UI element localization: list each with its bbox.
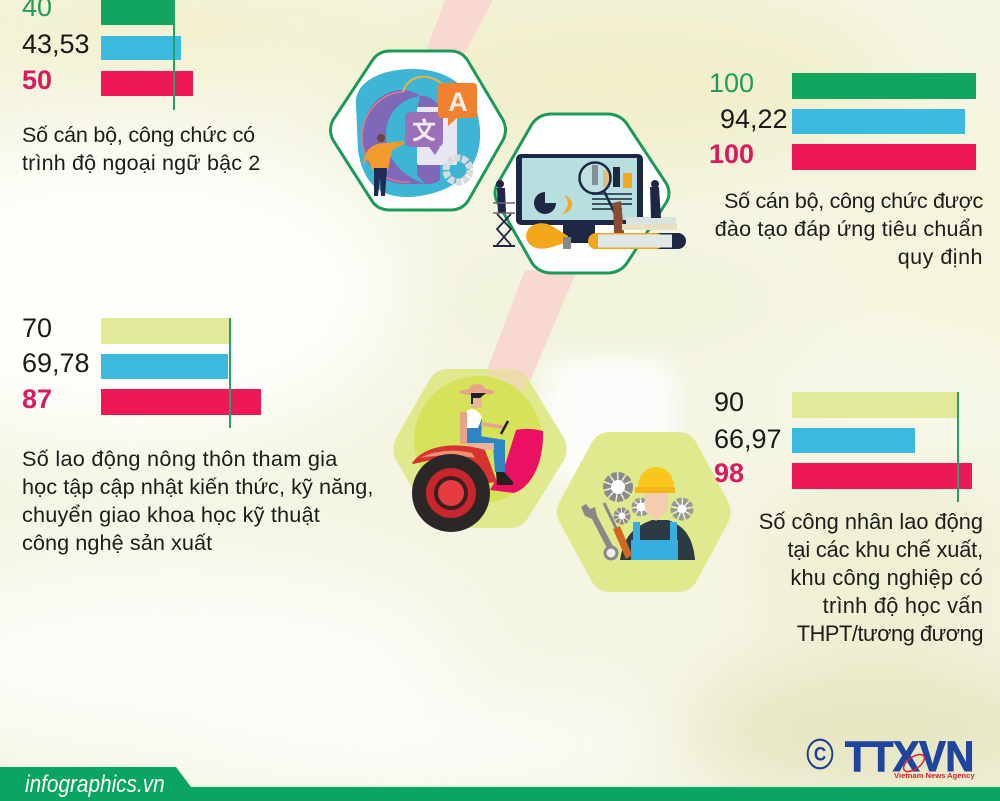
value 87: 87 bbox=[22, 384, 52, 414]
target line bbox=[173, 0, 174, 110]
bar green bbox=[792, 73, 976, 99]
icon: farmer on tractor bbox=[394, 369, 566, 532]
caption: học tập cập nhật kiến thức, kỹ năng, bbox=[22, 474, 374, 498]
caption: đào tạo đáp ứng tiêu chuẩn bbox=[715, 217, 983, 241]
logo: TTXVN bbox=[806, 733, 975, 781]
caption: THPT/tương đương bbox=[797, 621, 983, 646]
caption: khu công nghiệp có bbox=[790, 565, 983, 590]
caption bbox=[715, 189, 983, 269]
value 100: 100 bbox=[709, 68, 754, 98]
target line bbox=[229, 318, 230, 428]
bar green bbox=[101, 0, 174, 25]
caption bbox=[22, 446, 374, 554]
caption: Số công nhân lao động bbox=[759, 509, 983, 534]
caption: Số cán bộ, công chức được bbox=[724, 189, 983, 213]
caption: Số cán bộ, công chức có bbox=[22, 123, 255, 147]
caption bbox=[759, 509, 983, 646]
caption: quy định bbox=[898, 245, 983, 269]
value 69,78: 69,78 bbox=[22, 348, 90, 378]
caption: Số lao động nông thôn tham gia bbox=[22, 446, 338, 470]
panel: top-left chart bbox=[22, 0, 260, 175]
value 70: 70 bbox=[22, 313, 52, 343]
bar light bbox=[792, 392, 958, 418]
icon: language translation: 文 bbox=[412, 117, 436, 145]
value 50: 50 bbox=[22, 65, 52, 95]
tagline: Vietnam News Agency bbox=[894, 771, 975, 780]
target line bbox=[957, 392, 958, 502]
copyright mark: C bbox=[814, 743, 826, 765]
panel: middle-left chart bbox=[22, 313, 374, 554]
icon: language translation: A bbox=[448, 87, 468, 117]
value 100 red: 100 bbox=[709, 139, 754, 169]
wordmark: TTXVN bbox=[845, 733, 974, 781]
bar blue bbox=[792, 428, 915, 453]
bar blue bbox=[101, 354, 228, 379]
caption: trình độ ngoại ngữ bậc 2 bbox=[22, 151, 260, 175]
footer text: infographics.vn bbox=[25, 771, 165, 798]
value 94,22: 94,22 bbox=[720, 104, 788, 134]
globe arc bbox=[902, 754, 926, 772]
pink beams bbox=[422, 0, 493, 62]
bar blue bbox=[101, 36, 181, 60]
icon: language translation bbox=[329, 50, 507, 212]
footer band bbox=[0, 767, 1000, 801]
bar red bbox=[101, 71, 193, 96]
bar red bbox=[792, 144, 976, 170]
caption: công nghệ sản xuất bbox=[22, 530, 212, 554]
value 66,97: 66,97 bbox=[714, 424, 782, 454]
panel: middle-right chart bbox=[714, 387, 983, 646]
caption: chuyển giao khoa học kỹ thuật bbox=[22, 502, 320, 526]
copyright mark bbox=[807, 739, 833, 769]
caption: tại các khu chế xuất, bbox=[787, 537, 983, 562]
bar blue bbox=[792, 109, 965, 134]
bar light bbox=[101, 318, 229, 344]
bar red bbox=[101, 389, 261, 415]
bar red bbox=[792, 463, 972, 489]
icon: worker with gears bbox=[557, 432, 730, 592]
value 98: 98 bbox=[714, 458, 744, 488]
value 90: 90 bbox=[714, 387, 744, 417]
caption: trình độ học vấn bbox=[823, 593, 983, 618]
panel: top-right chart bbox=[709, 68, 983, 269]
caption bbox=[22, 123, 260, 175]
icon: computer data analysis bbox=[493, 112, 686, 274]
value 43,53: 43,53 bbox=[22, 29, 90, 59]
